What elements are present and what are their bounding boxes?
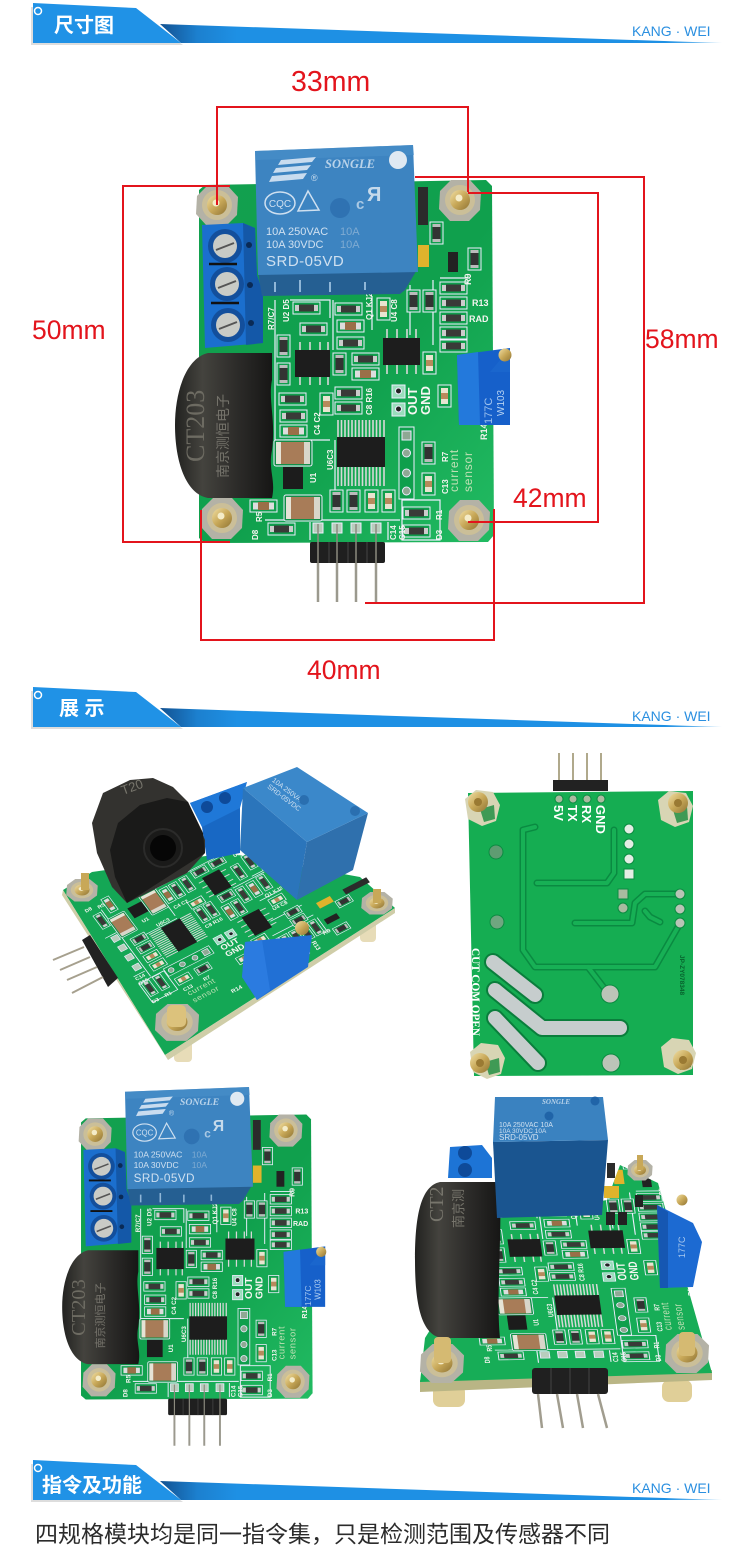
solder bar outline: [493, 962, 620, 1063]
dimension line: 50mm: [123, 186, 230, 542]
solder bars: [493, 962, 620, 1063]
pcb edge: [420, 1370, 712, 1392]
relay: 10A 250VAC: [270, 777, 306, 807]
pcb: [63, 853, 395, 1055]
terminal labels: CUT COM OPEN: [469, 948, 483, 1036]
photo: front angled view of module: [415, 1096, 712, 1428]
relay: 10A 250VAC 10A: [499, 1122, 553, 1129]
terminal block: [202, 223, 263, 348]
section header: 尺寸图: [31, 3, 722, 45]
pins: [553, 753, 608, 791]
photo: top view of module (small): [62, 1087, 326, 1446]
terminal block: [190, 782, 247, 860]
potentiometer: [457, 348, 512, 425]
pin labels: [551, 805, 608, 834]
section header: 指令及功能: [31, 1460, 722, 1502]
board code: JP-ZY078348: [678, 955, 685, 995]
relay: SONGLE: [542, 1098, 570, 1106]
relay: SRD-05VD: [499, 1133, 539, 1142]
dimension label: 33mm: 33mm: [291, 66, 370, 98]
section header: 尺寸图: 尺寸图: [54, 14, 114, 37]
dimension line: 40mm: [201, 509, 494, 640]
potentiometer: W103: [496, 389, 507, 416]
dimension label: 50mm: 50mm: [32, 315, 106, 345]
dimension label: 42mm: 42mm: [513, 483, 587, 513]
pcb: [199, 180, 494, 543]
copper traces: [523, 827, 678, 993]
mounting nuts: [196, 180, 490, 541]
section header: 指令及功能: KANG · WEI: [632, 1480, 711, 1496]
current transformer: CT203: [181, 390, 210, 462]
relay: [255, 145, 418, 296]
nuts: [420, 1155, 709, 1383]
pin header: [532, 1368, 608, 1428]
main product photo: top view board: [175, 145, 512, 602]
pcb: [420, 1165, 712, 1382]
photo: angled view of module: [53, 767, 395, 1062]
section header: 展示: KANG · WEI: [632, 708, 711, 724]
relay: 10A 30VDC 10A: [499, 1128, 547, 1135]
dimension label: 58mm: 58mm: [645, 324, 719, 354]
pin labels: 5V: [551, 805, 566, 821]
potentiometer: 177C: [677, 1236, 687, 1258]
section header: 尺寸图: KANG · WEI: [632, 23, 711, 39]
dimension line: 58mm: [365, 177, 644, 603]
standoff feet: [174, 920, 376, 1062]
section header: 展示: [31, 687, 722, 729]
section header: 指令及功能: 指令及功能: [42, 1473, 142, 1497]
dimension label: 40mm: 40mm: [307, 655, 381, 685]
potentiometer: 177C: [483, 398, 495, 424]
current transformer: [415, 1182, 500, 1338]
nuts: [66, 873, 393, 1041]
current transformer: 南京测恒电子: [215, 394, 231, 478]
photo: back of module: [465, 753, 696, 1079]
dimension line: 33mm: [217, 107, 468, 205]
footer text: 四规格模块均是同一指令集，只是检测范围及传感器不同: [35, 1521, 610, 1547]
pads: [489, 795, 685, 1072]
components: [478, 1166, 690, 1363]
components: [83, 794, 393, 1027]
pin labels: RX: [579, 805, 594, 823]
current transformer: CT2: [426, 1186, 448, 1222]
pcb: [468, 791, 693, 1076]
pin labels: TX: [565, 805, 580, 822]
current transformer: [92, 776, 205, 903]
terminal block: [448, 1145, 492, 1178]
section header: 展示: 展 示: [59, 698, 105, 720]
potentiometer: [242, 921, 312, 1000]
trace fill: [523, 827, 678, 993]
upper board parts: [604, 1163, 643, 1225]
pin header: [53, 935, 118, 993]
standoff feet: [433, 1380, 692, 1407]
dimension line: 42mm: [468, 193, 598, 522]
relay: [240, 767, 368, 900]
relay: SRD-05VDC: [266, 784, 302, 813]
current transformer: T20: [119, 776, 145, 798]
current transformer: 南京测: [451, 1189, 466, 1228]
pin labels: GND: [593, 805, 608, 834]
pin header: [310, 524, 385, 602]
current transformer: [175, 353, 273, 498]
brass standoffs: [465, 790, 696, 1079]
potentiometer: [657, 1194, 702, 1288]
component layer: [250, 187, 489, 540]
relay: [493, 1096, 608, 1218]
